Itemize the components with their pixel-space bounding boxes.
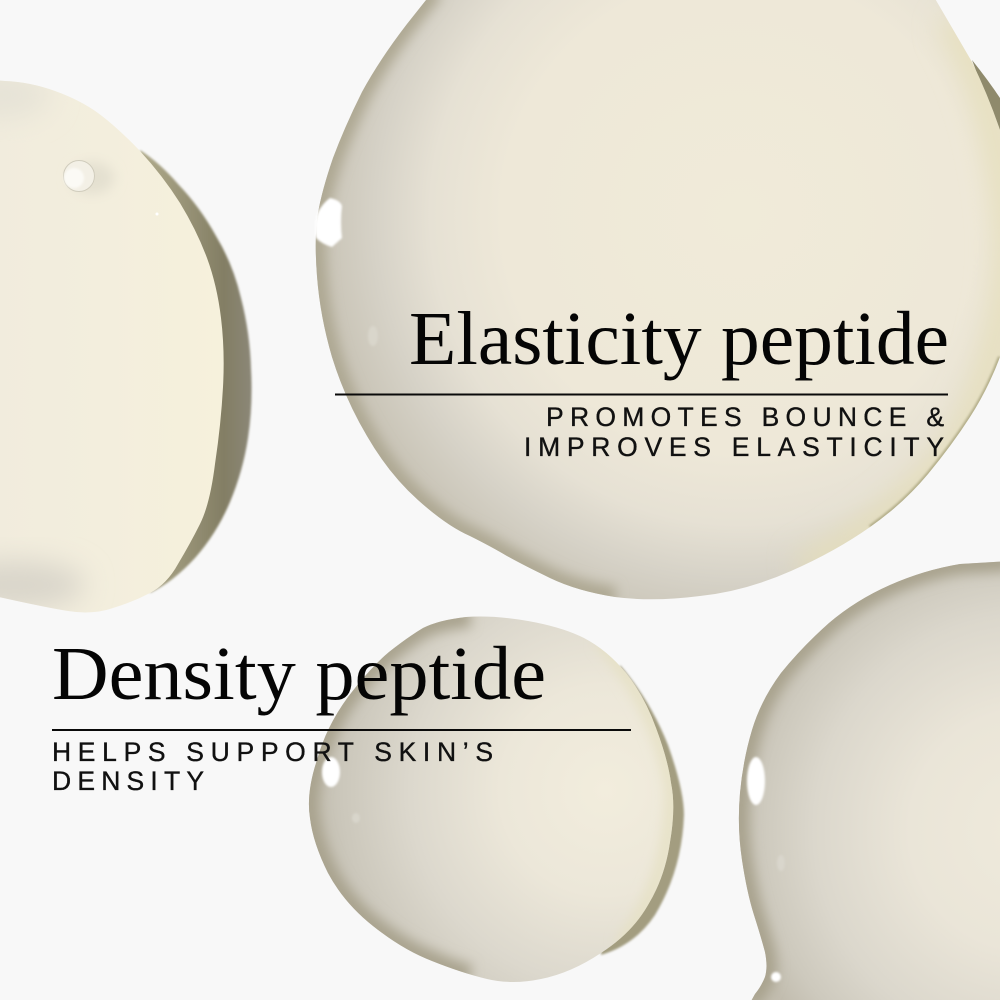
description <box>52 737 493 796</box>
heading: Density peptide <box>52 632 546 716</box>
serum drop: left <box>0 71 252 612</box>
description: PROMOTES BOUNCE & <box>546 402 944 432</box>
air bubble <box>63 160 114 194</box>
speck <box>156 212 158 216</box>
description: HELPS SUPPORT SKIN’S <box>52 737 493 767</box>
callout: elasticity peptide <box>335 297 949 462</box>
soft highlight <box>352 814 359 822</box>
soft highlight <box>368 328 377 345</box>
description: IMPROVES ELASTICITY <box>524 432 944 462</box>
heading: Elasticity peptide <box>409 297 949 381</box>
callout: density peptide <box>52 632 631 796</box>
warm right rim <box>800 20 1000 570</box>
highlight <box>322 757 340 787</box>
serum drop: bottom right <box>739 561 1000 1000</box>
description: DENSITY <box>52 766 204 796</box>
serum drop: bottom centre <box>309 616 684 982</box>
soft highlight <box>778 856 784 870</box>
highlight <box>771 972 781 982</box>
highlight <box>747 757 765 805</box>
grey left rim <box>316 0 615 597</box>
highlight <box>315 198 342 247</box>
serum drop: top right <box>315 0 1000 599</box>
olive lower-right edge <box>870 357 1000 527</box>
description <box>524 402 944 462</box>
